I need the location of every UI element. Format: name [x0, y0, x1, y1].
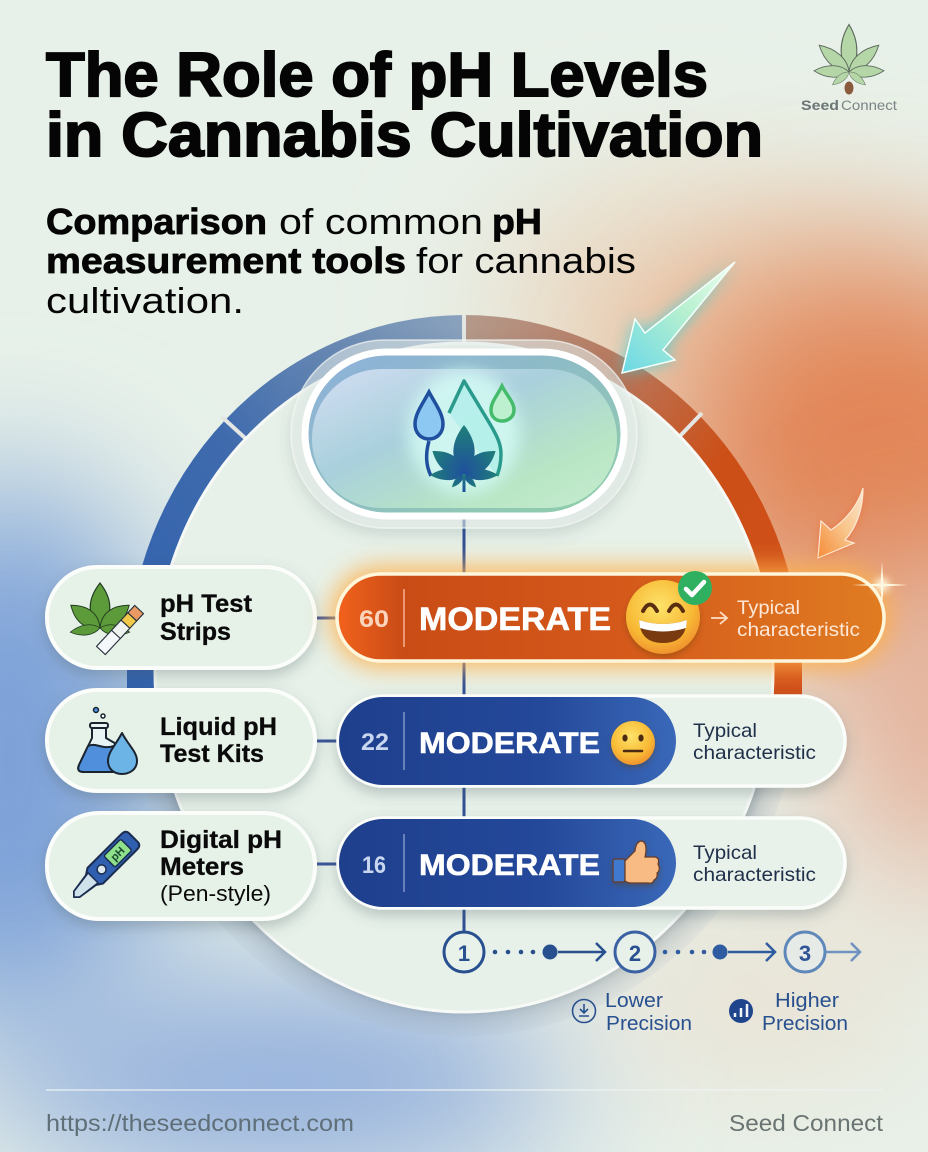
step 3	[785, 932, 825, 972]
characteristic text: characteristic	[693, 864, 816, 886]
legend: higher precision	[729, 990, 848, 1035]
icon: bars	[729, 999, 753, 1023]
icon: flask and drop	[78, 708, 137, 774]
label text	[160, 590, 253, 646]
legend: higher precision: Precision	[762, 1013, 848, 1035]
title: in Cannabis Cultivation	[46, 101, 763, 170]
legend: lower precision: Precision	[606, 1013, 692, 1035]
logo: Seed Connect	[801, 24, 897, 113]
label text: Digital pH	[160, 826, 282, 854]
row 3 label: Digital pH Meters	[47, 813, 315, 919]
footer	[46, 1090, 884, 1136]
subtitle: cultivation.	[46, 280, 244, 321]
connector stubs	[317, 618, 338, 864]
legend: lower precision	[572, 990, 692, 1035]
icon: download	[572, 1000, 596, 1022]
row 2 bar: blue: MODERATE	[419, 727, 600, 760]
central disc	[155, 343, 773, 1012]
step 2: 2	[629, 941, 641, 966]
step 1: 1	[458, 941, 470, 966]
characteristic text	[737, 597, 860, 641]
row 2 bar: blue: 22	[361, 729, 389, 756]
step 3: 3	[799, 941, 811, 966]
title: The Role of pH Levels	[46, 41, 708, 110]
label text: (Pen-style)	[160, 881, 271, 906]
icon: grinning emoji with check	[626, 571, 712, 654]
characteristic text: Typical	[693, 842, 757, 864]
label text	[160, 713, 277, 768]
row 2 bar: blue	[338, 696, 845, 786]
subtitle: pH	[492, 201, 542, 242]
sparkle	[852, 561, 908, 609]
footer: Seed Connect	[729, 1110, 884, 1136]
icon: neutral emoji	[611, 721, 655, 765]
label text	[160, 826, 282, 906]
logo: Seed Connect: Seed	[801, 98, 839, 113]
label text: Meters	[160, 853, 244, 881]
row 3 bar: blue: MODERATE	[419, 849, 600, 882]
row 1 bar: orange highlight: MODERATE	[419, 601, 611, 637]
label text: Liquid pH	[160, 713, 277, 741]
subtitle: measurement tools	[46, 240, 406, 281]
step 1	[444, 932, 484, 972]
icon: leaf and test strip	[66, 583, 143, 655]
label text: Strips	[160, 618, 231, 646]
row 1 bar: orange highlight	[330, 561, 908, 668]
subtitle: for cannabis	[416, 240, 636, 281]
characteristic text: Typical	[693, 720, 757, 742]
central capsule with drop icon	[291, 340, 637, 528]
row 1 bar: orange highlight: 60	[359, 606, 389, 633]
label text: Test Kits	[160, 740, 264, 768]
logo: Seed Connect: Connect	[841, 98, 897, 113]
arrow 2 to 3	[663, 943, 775, 961]
legend: lower precision: Lower	[605, 990, 663, 1012]
characteristic text: characteristic	[737, 619, 860, 641]
precision scale flow	[444, 932, 860, 972]
row 3 bar: blue	[338, 818, 845, 908]
footer: https://theseedconnect.com	[46, 1110, 354, 1136]
step 2	[615, 932, 655, 972]
legend: higher precision: Higher	[775, 990, 839, 1012]
subtitle: Comparison	[46, 201, 267, 242]
vertical connector	[462, 518, 466, 932]
row 2 label: Liquid pH Test Kits	[47, 690, 315, 791]
characteristic text	[693, 842, 816, 886]
subtitle	[46, 201, 636, 321]
arrow after 3	[826, 943, 860, 961]
row 1 label: pH Test Strips	[47, 567, 315, 668]
title	[46, 41, 763, 170]
characteristic text	[693, 720, 816, 764]
characteristic text: Typical	[737, 597, 800, 619]
label text: pH Test	[160, 590, 253, 618]
characteristic text: characteristic	[693, 742, 816, 764]
arrow 1 to 2	[493, 943, 605, 961]
arrow: cyan pointer	[622, 262, 735, 373]
icon: water drops and leaf	[408, 370, 520, 494]
icon: thumbs up	[613, 841, 659, 883]
outer ring	[127, 315, 802, 1037]
icon: pen meter	[66, 830, 141, 905]
subtitle: of common	[279, 201, 483, 242]
arrow: orange pointer	[818, 488, 863, 558]
icon: pen meter: pH	[109, 845, 128, 864]
row 3 bar: blue: 16	[362, 852, 386, 879]
